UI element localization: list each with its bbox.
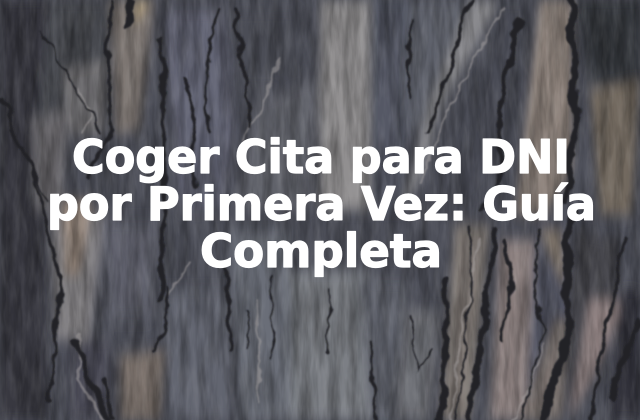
title	[47, 130, 596, 278]
title: Coger Cita para DNI	[72, 130, 570, 184]
title: por Primera Vez: Guía	[47, 177, 596, 231]
title: Completa	[200, 224, 442, 278]
light ridges	[78, 10, 545, 420]
